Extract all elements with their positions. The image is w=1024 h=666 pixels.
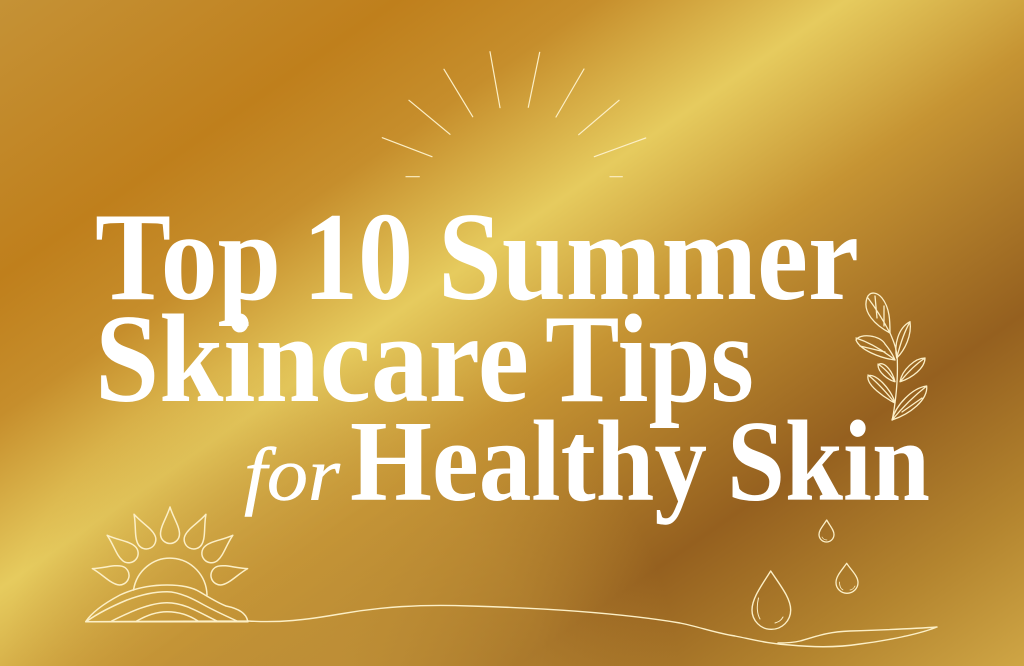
icon: medium water drop <box>836 563 858 593</box>
sun ray petals <box>90 507 250 587</box>
title line: Top 10 Summer: Summer <box>438 188 859 327</box>
icon: sun rays at top <box>382 52 646 177</box>
title line: Top 10 Summer: Top <box>95 188 281 327</box>
title line: Skincare Tips: Skincare <box>95 290 529 429</box>
title line: Healthy Skin <box>350 398 930 525</box>
title line: Top 10 Summer: 10 <box>303 188 413 327</box>
icon: sun over hills <box>86 507 250 622</box>
title line: Healthy Skin: Healthy <box>350 398 707 525</box>
title word: for: for <box>244 433 340 517</box>
title line: Skincare Tips: Tips <box>545 290 754 429</box>
title line: Healthy Skin: Skin <box>727 398 930 525</box>
sun disc <box>134 558 207 595</box>
title line: Top 10 Summer <box>95 188 859 327</box>
ground line <box>248 605 937 647</box>
hills <box>86 585 248 622</box>
icon: small water drop <box>819 520 834 542</box>
icon: large water drop <box>752 571 791 629</box>
icon: leaf branch <box>856 293 927 420</box>
